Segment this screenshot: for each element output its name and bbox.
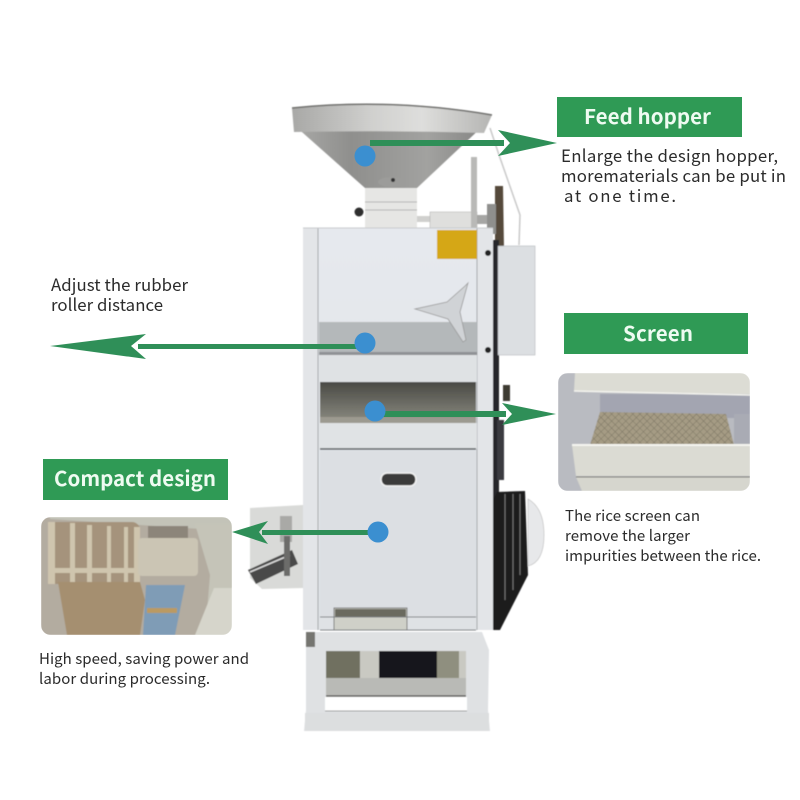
hopper neck and drive shaft [354,157,504,250]
arrow: screen [375,403,556,425]
photo: compact design [41,517,232,635]
warning label [437,230,477,259]
hopper [292,103,520,245]
description: Feed hopper: Enlarge the design hopper, [561,143,778,167]
description: Compact design: High speed, saving power and [39,648,249,669]
arrow: feed hopper [370,130,557,156]
label: Compact design: Compact design [54,462,216,492]
description: Screen: remove the larger [565,525,690,546]
label: Screen [564,313,748,354]
label: Feed hopper [557,97,742,137]
description: Screen: The rice screen can [565,505,700,526]
description: Screen [565,505,761,566]
handle [415,283,468,342]
photo: screen [558,373,750,491]
description: rubber roller: Adjust the rubber [51,272,188,296]
description: Feed hopper: at one time. [564,183,676,207]
screen opening [320,382,476,422]
description: Compact design [39,648,249,689]
side box [485,246,535,355]
lower door [320,451,476,616]
description: rubber roller: roller distance [51,292,163,316]
base frame [304,632,490,731]
marker: screen [364,400,386,422]
machine body [303,228,499,630]
label: Screen: Screen [623,317,693,347]
description: Feed hopper [561,143,786,207]
upper panel divider [319,322,477,352]
arrow: rubber roller [50,334,365,359]
arrow: compact design [232,521,378,544]
side outlet [248,505,303,589]
marker: compact [368,522,388,542]
description: Feed hopper: morematerials can be put in [561,163,786,187]
marker: roller [354,332,376,354]
description: Screen: impurities between the rice. [565,545,761,566]
belt and pulley [493,385,544,630]
description: rubber roller [51,272,188,316]
machine illustration [248,103,544,731]
marker: hopper [354,146,376,166]
label: Compact design [43,459,228,500]
description: Compact design: labor during processing. [39,668,210,689]
label: Feed hopper: Feed hopper [584,100,711,130]
